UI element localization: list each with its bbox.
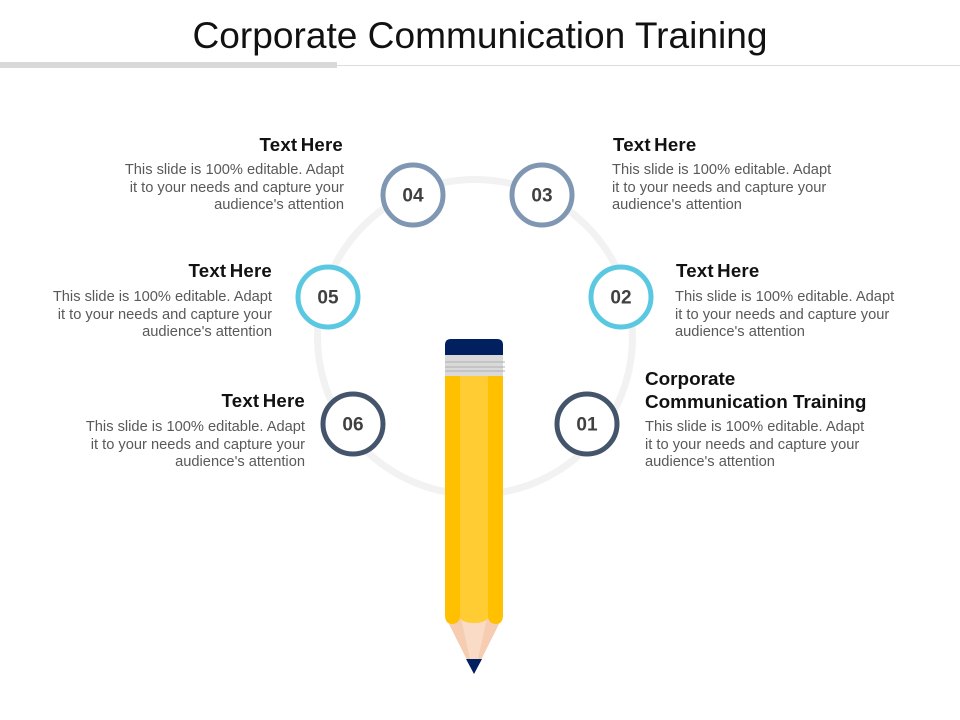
text block 02: it to your needs and capture your [675,307,889,323]
text block 04: audience's attention [214,197,344,213]
text block 04: This slide is 100% editable. Adapt [125,162,344,178]
text block 03: Text Here [613,134,696,155]
text block 05: audience's attention [142,324,272,340]
badge 02 [591,267,651,327]
text block 06 [86,390,305,470]
ring [318,180,632,494]
text block 01 [645,369,866,470]
text block 03: This slide is 100% editable. Adapt [612,162,831,178]
text block 04: Text Here [260,134,343,155]
badge 03 [512,165,572,225]
text block 06: it to your needs and capture your [91,437,305,453]
text block 06: Text Here [222,390,305,411]
text block 01: This slide is 100% editable. Adapt [645,419,864,435]
badge 05 [298,267,358,327]
text block 05 [53,260,272,340]
text block 03 [612,134,832,213]
badge 01 [557,394,617,454]
text block 05: it to your needs and capture your [58,307,272,323]
badge 04 [383,165,443,225]
text block 01: it to your needs and capture your [645,437,859,453]
badge 02: 02 [610,288,632,308]
text block 06: This slide is 100% editable. Adapt [86,419,305,435]
text block 04 [125,134,344,213]
text block 05: This slide is 100% editable. Adapt [53,289,272,305]
badge 06 [323,394,383,454]
badge 04: 04 [402,186,424,206]
text block 04: it to your needs and capture your [130,180,344,196]
badge 03: 03 [531,186,553,206]
text block 02: This slide is 100% editable. Adapt [675,289,894,305]
text block 02: audience's attention [675,324,805,340]
text block 06: audience's attention [175,454,305,470]
text block 02: Text Here [676,260,759,281]
text block 01: audience's attention [645,454,775,470]
title: Corporate Communication Training [192,14,767,56]
text block 01: Corporate [645,369,735,390]
text block 01: Communication Training [645,392,866,413]
text block 02 [675,260,894,340]
title underline [0,62,960,68]
icon: pencil [445,339,505,674]
badge 06: 06 [342,414,364,436]
badge 05: 05 [317,288,339,308]
badge 01: 01 [576,414,598,436]
text block 03: audience's attention [612,197,742,213]
text block 05: Text Here [189,260,272,281]
text block 03: it to your needs and capture your [612,180,826,196]
